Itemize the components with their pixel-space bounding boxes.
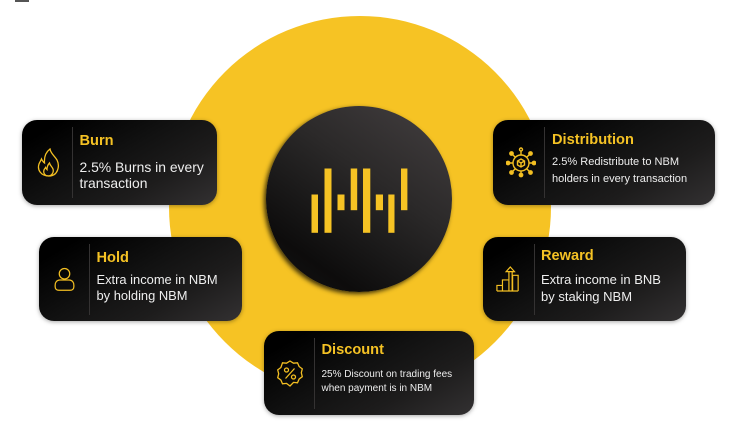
description: 25% Discount on trading fees (322, 368, 452, 380)
heading: Distribution (552, 132, 634, 148)
panel: hold (38, 236, 242, 321)
description: holders in every transaction (552, 172, 687, 184)
icon: percent badge (277, 360, 303, 387)
heading: Hold (96, 250, 129, 266)
description: Extra income in BNB (541, 272, 661, 287)
description: 2.5% Burns in every (80, 159, 204, 175)
description: by holding NBM (96, 288, 188, 303)
icon: person (54, 268, 74, 291)
panel: burn (22, 120, 216, 204)
description (80, 159, 204, 191)
panel: distribution (493, 120, 714, 204)
description: Extra income in NBM (96, 272, 218, 286)
description: transaction (80, 175, 147, 191)
panel: discount (264, 330, 474, 415)
description (552, 156, 687, 184)
description: by staking NBM (541, 289, 632, 304)
heading: Discount (322, 342, 384, 358)
icon: flame (38, 148, 60, 177)
icon: rising bars (496, 266, 519, 292)
description (322, 368, 452, 394)
description (541, 272, 661, 304)
heading: Reward (541, 248, 594, 264)
logo bars (312, 168, 408, 233)
panel: reward (483, 236, 686, 321)
top edge mark (15, 0, 29, 2)
description: when payment is in NBM (322, 383, 432, 394)
yellow background circle (169, 16, 551, 398)
description: 2.5% Redistribute to NBM (552, 156, 679, 168)
description (96, 272, 218, 303)
central dark circle with logo (266, 106, 452, 292)
icon: network box (506, 147, 536, 178)
heading: Burn (80, 132, 114, 148)
